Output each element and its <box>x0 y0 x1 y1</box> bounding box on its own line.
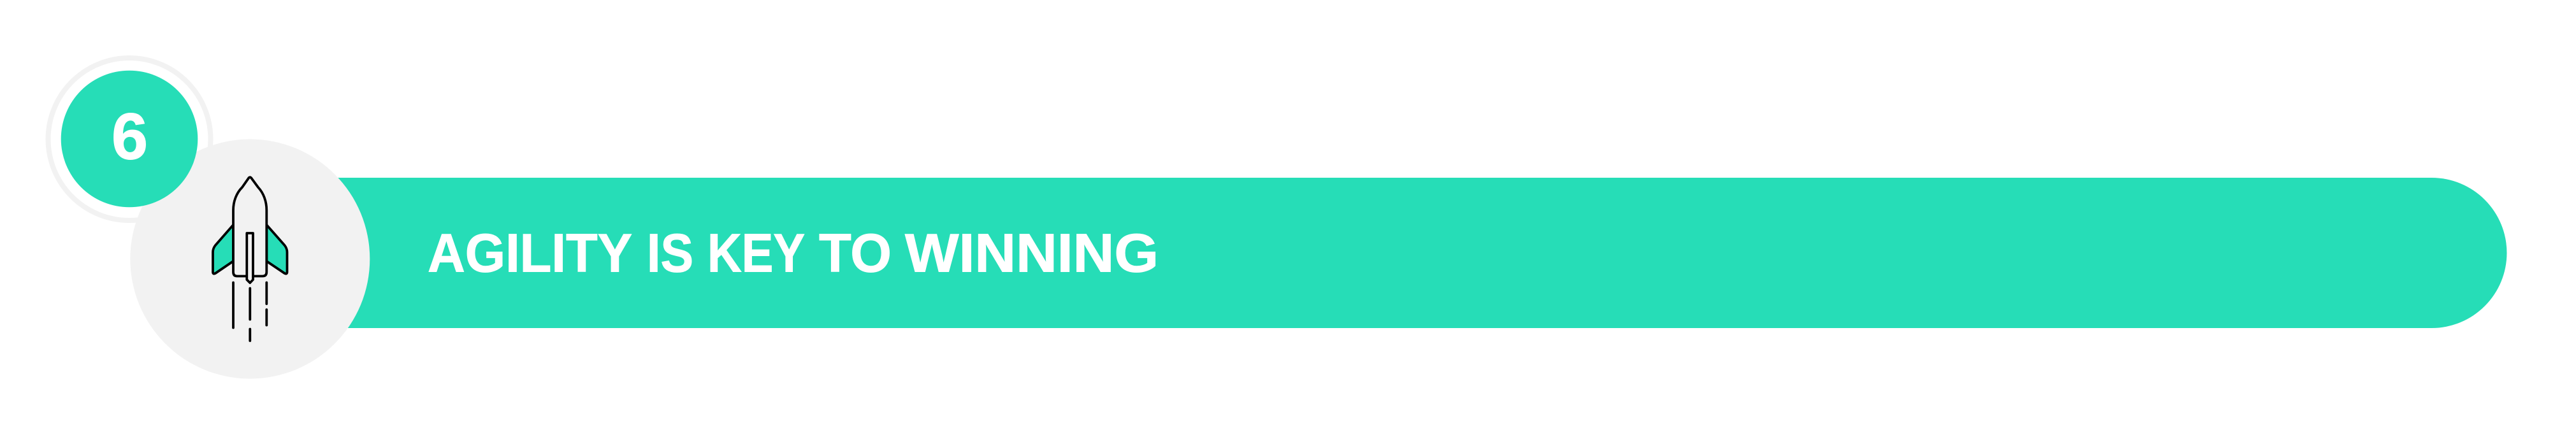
center stripe <box>247 233 253 283</box>
number ring <box>48 58 210 220</box>
banner bar <box>191 178 2507 328</box>
left fin <box>213 225 233 274</box>
icon: rocket <box>213 177 287 341</box>
icon circle <box>130 139 370 378</box>
number badge <box>61 71 198 207</box>
heading: WINNING <box>905 224 1159 284</box>
right fin <box>266 225 287 274</box>
exhaust trails <box>233 283 266 341</box>
heading: IS <box>647 224 693 284</box>
heading: TO <box>819 224 892 284</box>
heading <box>428 224 1159 284</box>
heading: KEY <box>707 224 805 284</box>
number 6: 6 <box>112 99 148 173</box>
rocket body <box>233 177 266 276</box>
heading: AGILITY <box>428 224 632 284</box>
